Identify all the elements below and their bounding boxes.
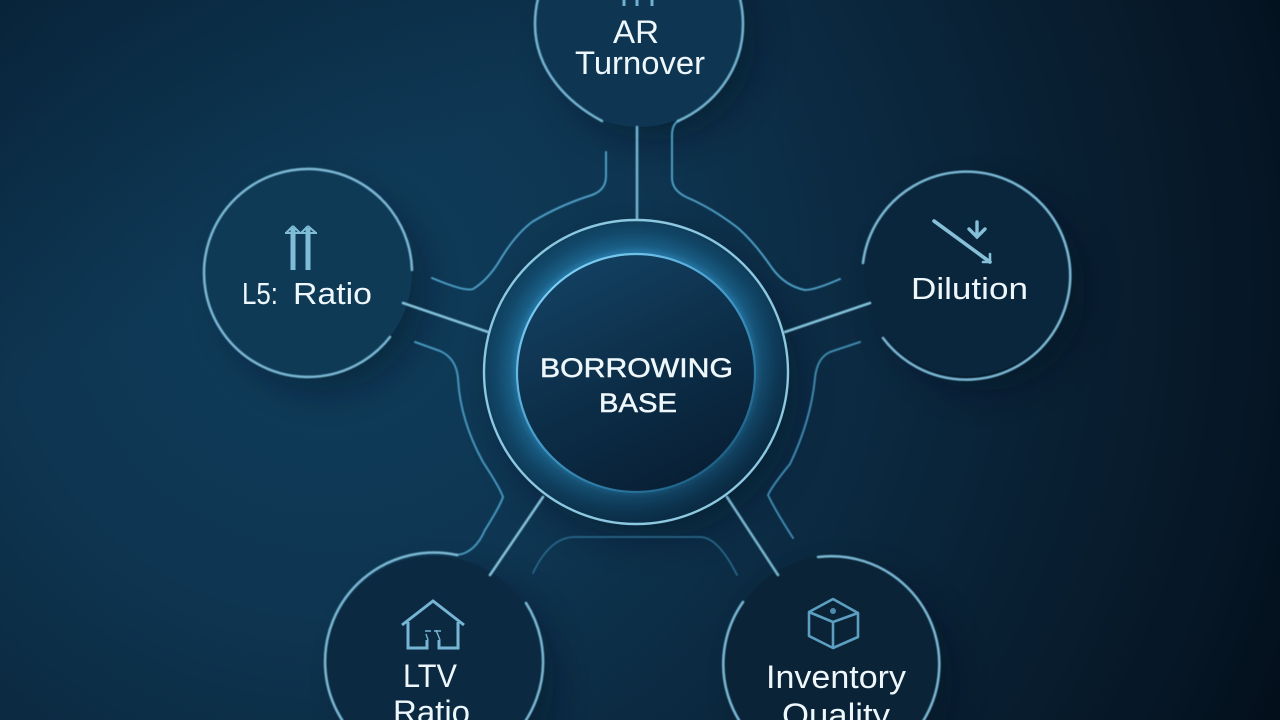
ring arc: AR Turnover	[535, 0, 743, 121]
connector: bottom arc	[533, 537, 737, 575]
node: LS Ratio	[242, 226, 372, 311]
label: Inventory Quality: Inventory	[766, 659, 906, 695]
node rings	[204, 0, 1070, 720]
hub label	[540, 353, 733, 418]
connector: lower-left curve	[415, 342, 503, 555]
hub label: BORROWING	[540, 353, 733, 383]
ring arc: right node	[863, 172, 1070, 380]
hub label: BASE	[599, 388, 677, 418]
connector: left spoke	[403, 303, 488, 332]
icon: bars	[624, 0, 652, 6]
node drop shadows	[225, 0, 1085, 720]
connector: right spoke	[785, 303, 870, 332]
node: Inventory Quality	[766, 599, 906, 720]
label: AR Turnover: AR	[613, 14, 659, 50]
node fills	[206, 0, 1070, 720]
icon: falling line with arrow	[934, 221, 990, 262]
connector: top-right curve	[672, 121, 840, 290]
label: Dilution: Dilution	[911, 271, 1028, 306]
connector: lower-right spoke	[727, 497, 778, 575]
icon: two up arrows	[285, 226, 317, 270]
label: AR Turnover	[575, 14, 705, 81]
node: AR Turnover	[575, 0, 705, 81]
label: LTV Ratio: LTV	[403, 658, 458, 694]
central hub	[484, 220, 788, 524]
connector: top-left curve	[432, 152, 606, 290]
ring arc: lower-right node	[723, 556, 939, 720]
icon: cube	[809, 599, 858, 648]
ring arc: lower-left node	[325, 553, 543, 720]
connector: lower-left spoke	[490, 497, 543, 575]
label: Inventory Quality	[766, 659, 906, 720]
connector lines	[403, 121, 870, 575]
node: Dilution	[911, 221, 1028, 306]
node: LTV Ratio	[393, 601, 470, 720]
connector: top spoke	[636, 127, 638, 222]
hub inner disc	[517, 254, 755, 492]
label: LS Ratio: L5:	[242, 276, 278, 311]
label: LTV Ratio	[393, 658, 470, 720]
hub ring shading	[484, 220, 788, 524]
icon: house	[402, 601, 464, 648]
label: LS Ratio: Ratio	[293, 276, 372, 311]
label: AR Turnover: Turnover	[575, 45, 705, 81]
connector: lower-right curve	[768, 342, 860, 538]
hub outer ring	[484, 220, 788, 524]
hub outer edge	[484, 220, 788, 524]
label: LS Ratio	[242, 276, 372, 311]
ring arc: left node	[204, 169, 412, 377]
